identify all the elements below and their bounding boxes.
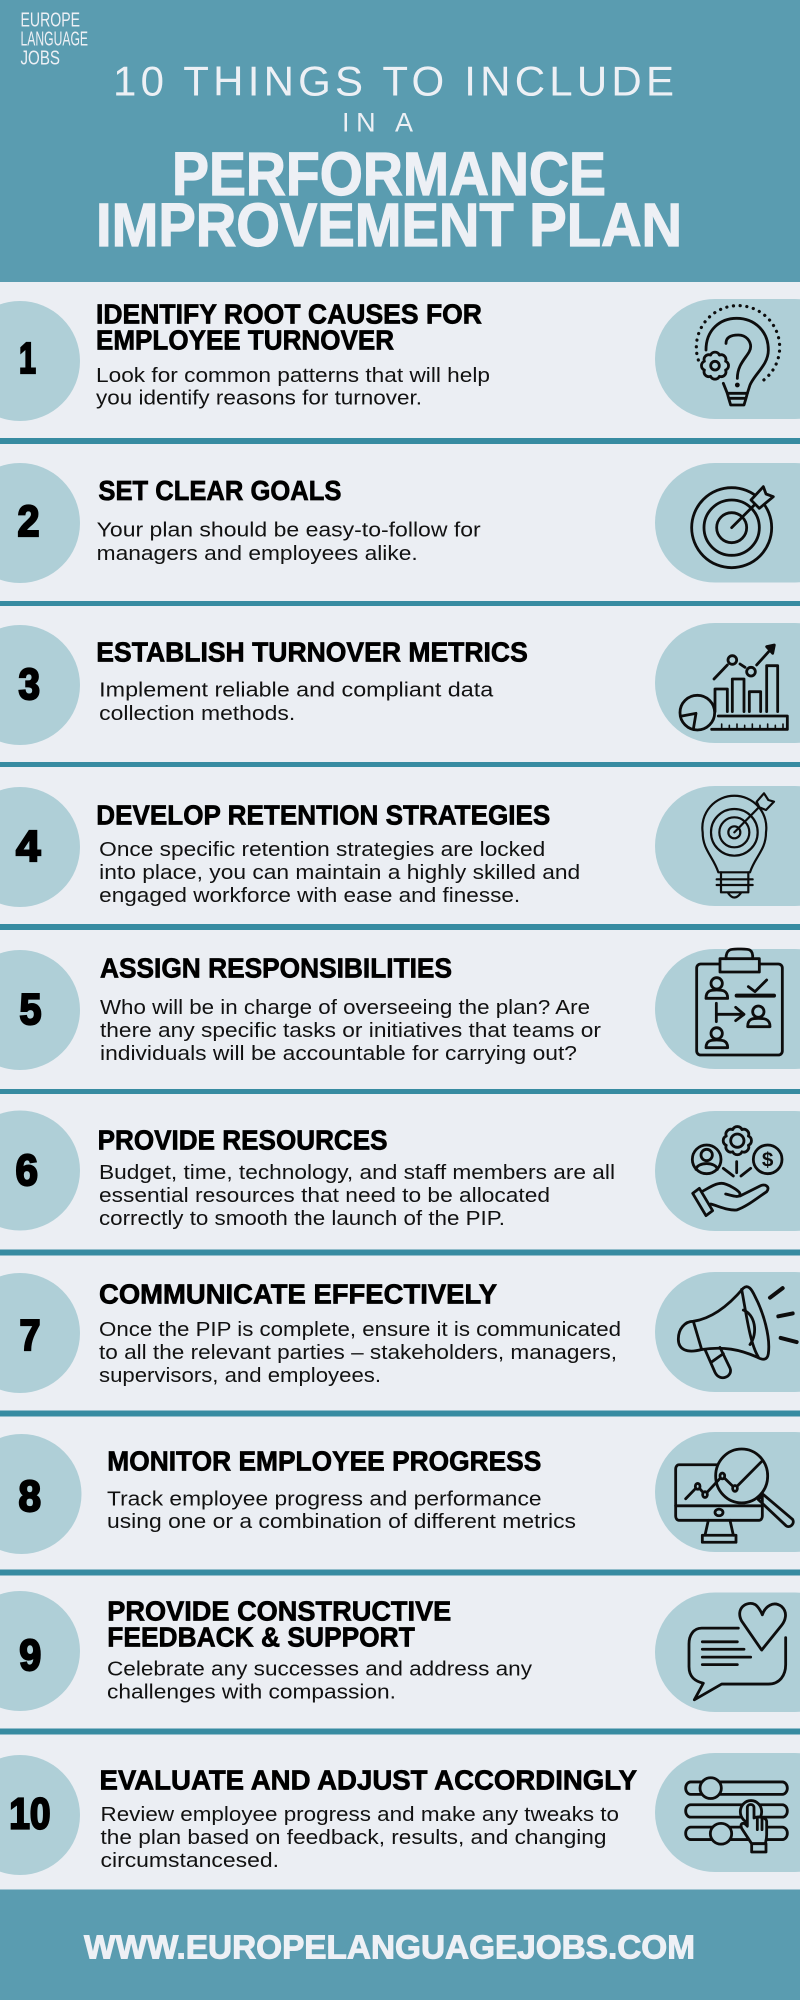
number badge 4 bbox=[0, 787, 80, 907]
heading 1 bbox=[96, 298, 482, 355]
text 4: engaged workforce with ease and finesse. bbox=[99, 885, 520, 907]
heading 6: PROVIDE RESOURCES bbox=[98, 1125, 388, 1156]
number badge 10: 10 bbox=[9, 1790, 50, 1839]
logo: Europe Language Jobs: JOBS bbox=[20, 47, 60, 69]
icon: hand with resources: $ bbox=[762, 1149, 774, 1172]
text 1: you identify reasons for turnover. bbox=[96, 388, 422, 410]
icon: sliders with pointing hand bbox=[655, 1753, 800, 1872]
heading 9: PROVIDE CONSTRUCTIVE bbox=[107, 1596, 451, 1627]
panel: item 1 bbox=[0, 298, 800, 421]
number badge 5: 5 bbox=[20, 985, 42, 1034]
heading 1: IDENTIFY ROOT CAUSES FOR bbox=[96, 298, 482, 329]
icon: speech bubble with heart bbox=[655, 1592, 800, 1712]
icon: light bulb with target bbox=[655, 786, 800, 906]
icon: clipboard with people bbox=[655, 949, 800, 1069]
text 2: managers and employees alike. bbox=[97, 543, 418, 565]
text 5: individuals will be accountable for carrying out? bbox=[100, 1043, 577, 1065]
text 1 bbox=[96, 365, 490, 410]
number badge 2 bbox=[0, 463, 80, 583]
text 7: Once the PIP is complete, ensure it is communicated bbox=[99, 1319, 621, 1341]
number badge 10 bbox=[0, 1755, 80, 1875]
number badge 5 bbox=[0, 950, 80, 1070]
text 10 bbox=[100, 1804, 619, 1872]
text 6 bbox=[99, 1162, 615, 1230]
title: PERFORMANCE bbox=[172, 140, 606, 208]
heading 7: COMMUNICATE EFFECTIVELY bbox=[99, 1279, 497, 1310]
panel: item 10 bbox=[0, 1753, 800, 1875]
heading 1: EMPLOYEE TURNOVER bbox=[96, 324, 394, 355]
logo: Europe Language Jobs bbox=[20, 10, 88, 69]
text 7: to all the relevant parties – stakeholders, managers, bbox=[99, 1342, 617, 1364]
text 8: Track employee progress and performance bbox=[107, 1488, 542, 1510]
panel: item 4 bbox=[0, 786, 800, 907]
text 2: Your plan should be easy-to-follow for bbox=[97, 520, 481, 542]
text 4: into place, you can maintain a highly skilled and bbox=[99, 862, 580, 884]
title: 10 THINGS TO INCLUDE bbox=[113, 58, 674, 105]
text 6: Budget, time, technology, and staff members are all bbox=[99, 1162, 615, 1184]
icon: hand with resources bbox=[655, 1111, 800, 1231]
number badge 6: 6 bbox=[16, 1146, 38, 1195]
heading 5: ASSIGN RESPONSIBILITIES bbox=[100, 953, 452, 984]
text 8: using one or a combination of different metrics bbox=[107, 1511, 576, 1533]
number badge 9: 9 bbox=[19, 1631, 41, 1680]
panel: item 2 bbox=[0, 463, 800, 583]
number badge 1: 1 bbox=[19, 334, 36, 383]
panel: item 8 bbox=[0, 1432, 800, 1554]
icon: megaphone bbox=[655, 1272, 800, 1392]
text 3: Implement reliable and compliant data bbox=[99, 680, 494, 702]
text 8 bbox=[107, 1488, 576, 1533]
heading 10: EVALUATE AND ADJUST ACCORDINGLY bbox=[100, 1765, 637, 1796]
panel: item 6 bbox=[0, 1110, 800, 1231]
panel: item 9 bbox=[0, 1591, 800, 1712]
text 3: collection methods. bbox=[99, 703, 295, 725]
number badge 3 bbox=[0, 625, 80, 745]
text 10: the plan based on feedback, results, and changing bbox=[100, 1827, 606, 1849]
text 10: Review employee progress and make any tweaks to bbox=[100, 1804, 619, 1826]
icon: target with arrow bbox=[655, 463, 800, 582]
logo: Europe Language Jobs: LANGUAGE bbox=[20, 29, 88, 51]
icon: bar chart with pie and ruler bbox=[655, 623, 800, 743]
text 7: supervisors, and employees. bbox=[99, 1365, 381, 1387]
text 7 bbox=[99, 1319, 621, 1387]
number badge 3: 3 bbox=[18, 660, 40, 709]
text 1: Look for common patterns that will help bbox=[96, 365, 490, 387]
heading 8: MONITOR EMPLOYEE PROGRESS bbox=[107, 1446, 541, 1477]
website URL: WWW.EUROPELANGUAGEJOBS.COM bbox=[84, 1929, 695, 1966]
panel: item 3 bbox=[0, 623, 800, 745]
heading 4: DEVELOP RETENTION STRATEGIES bbox=[96, 799, 550, 830]
panel: item 5 bbox=[0, 949, 800, 1070]
logo: Europe Language Jobs: EUROPE bbox=[20, 10, 80, 32]
text 5: Who will be in charge of overseeing the plan? Are bbox=[100, 997, 590, 1019]
text 2 bbox=[97, 520, 481, 565]
title: IMPROVEMENT PLAN bbox=[96, 191, 682, 259]
text 10: circumstancesed. bbox=[100, 1850, 279, 1872]
text 5 bbox=[100, 997, 601, 1065]
title: IN A bbox=[342, 108, 413, 138]
text 4: Once specific retention strategies are locked bbox=[99, 839, 545, 861]
text 9: challenges with compassion. bbox=[107, 1681, 396, 1703]
number badge 2: 2 bbox=[18, 497, 40, 546]
number badge 6 bbox=[0, 1110, 80, 1230]
text 6: correctly to smooth the launch of the PIP. bbox=[99, 1208, 505, 1230]
number badge 8 bbox=[0, 1434, 82, 1554]
heading 2: SET CLEAR GOALS bbox=[98, 475, 341, 506]
text 3 bbox=[99, 680, 494, 725]
number badge 4: 4 bbox=[16, 822, 41, 871]
number badge 9 bbox=[0, 1591, 80, 1711]
text 6: essential resources that need to be allocated bbox=[99, 1185, 550, 1207]
icon: light bulb with question mark and gear bbox=[655, 299, 800, 419]
text 9: Celebrate any successes and address any bbox=[107, 1658, 532, 1680]
text 9 bbox=[107, 1658, 532, 1703]
text 4 bbox=[99, 839, 580, 907]
number badge 8: 8 bbox=[18, 1472, 41, 1521]
number badge 7: 7 bbox=[20, 1311, 40, 1360]
footer banner bbox=[0, 1890, 800, 2000]
heading 3: ESTABLISH TURNOVER METRICS bbox=[96, 637, 528, 668]
heading 9: FEEDBACK & SUPPORT bbox=[107, 1622, 415, 1653]
header banner bbox=[0, 0, 800, 282]
title bbox=[96, 58, 682, 259]
icon: monitor with magnifier bbox=[655, 1432, 800, 1552]
text 5: there any specific tasks or initiatives that teams or bbox=[100, 1020, 601, 1042]
number badge 1 bbox=[0, 301, 80, 421]
number badge 7 bbox=[0, 1273, 80, 1393]
panel: item 7 bbox=[0, 1272, 800, 1393]
heading 9 bbox=[107, 1596, 451, 1653]
